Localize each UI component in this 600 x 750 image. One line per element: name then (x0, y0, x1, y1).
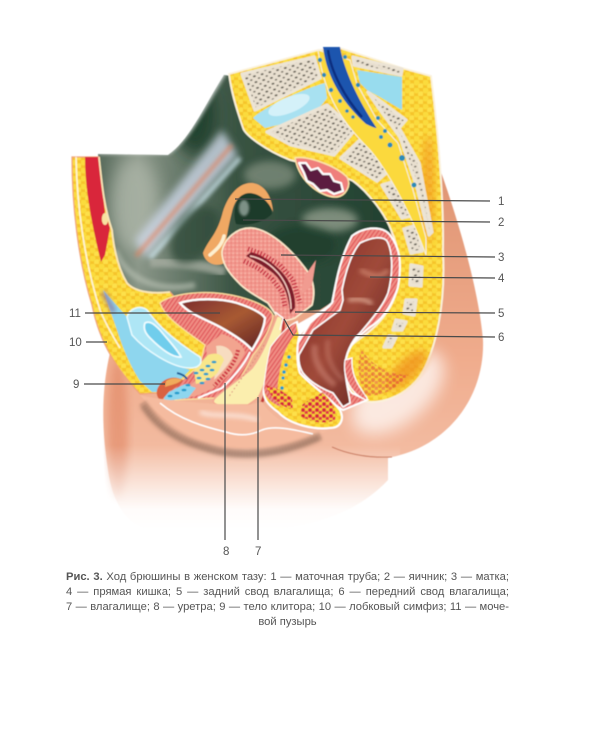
leader lines (84, 199, 495, 540)
leader 10 (86, 341, 107, 343)
numeric labels: 11 (69, 308, 81, 320)
leader 7 (257, 397, 259, 540)
numeric labels: 4 (498, 273, 505, 285)
caption line 4: вой пузырь (258, 616, 317, 628)
numeric labels: 1 (498, 196, 504, 208)
numeric labels: 7 (255, 546, 261, 558)
perineum and anal canal (264, 322, 342, 428)
blue fascia at pubis (103, 290, 190, 392)
numeric labels: 8 (223, 546, 229, 558)
vertebrae and discs (242, 57, 432, 347)
leader 1 (235, 199, 490, 201)
caption (66, 571, 509, 628)
pubic symphysis (127, 308, 201, 368)
numeric labels: 2 (498, 217, 504, 229)
posterior ligament (357, 70, 402, 110)
spinal canal with nerve (318, 47, 426, 255)
leader 9 (84, 383, 165, 385)
disc: lumbosacral (253, 83, 327, 128)
spinous process (353, 57, 402, 75)
peritoneal cavity (dark green) (97, 74, 392, 316)
numeric labels: 5 (498, 308, 504, 320)
sigmoid colon section (295, 157, 349, 197)
numeric labels: 9 (73, 379, 79, 391)
numeric labels: 3 (498, 252, 504, 264)
numeric labels: 10 (69, 337, 82, 349)
skin: buttock and thigh (102, 174, 484, 506)
numeric labels (69, 196, 505, 558)
spine region fat (229, 48, 444, 402)
caption line 3: 7 — влагалище; 8 — уретра; 9 — тело клитора; 10 — лобковый симфиз; 11 — моче- (66, 601, 509, 613)
anatomical illustration (70, 46, 504, 555)
rectus muscle (85, 157, 110, 262)
rectum (296, 228, 408, 410)
leader 2 (243, 220, 490, 222)
leader 4 (370, 277, 495, 278)
vulva skin and pubic hair (140, 395, 327, 454)
presacral wall (345, 358, 367, 400)
uterus (222, 228, 316, 320)
numeric labels: 6 (498, 332, 504, 344)
caption line 1: Рис. 3. Ход брюшины в женском тазу: 1 — маточная труба; 2 — яичник; 3 — матка; (66, 571, 509, 583)
vagina (213, 312, 283, 405)
caption line 2: 4 — прямая кишка; 5 — задний свод влагалища; 6 — передний свод влагалища; (66, 586, 509, 598)
leader 6 (284, 319, 495, 337)
bladder (160, 293, 273, 400)
retropubic space: yellow with blue veins (163, 354, 224, 401)
leader 3 (281, 255, 495, 257)
clitoris (157, 378, 183, 400)
leader 11 (85, 312, 220, 314)
abdominal wall: fat layers (72, 157, 240, 394)
leader 8 (224, 383, 226, 540)
leader 5 (295, 312, 495, 313)
ovary and fallopian tube (203, 183, 273, 265)
